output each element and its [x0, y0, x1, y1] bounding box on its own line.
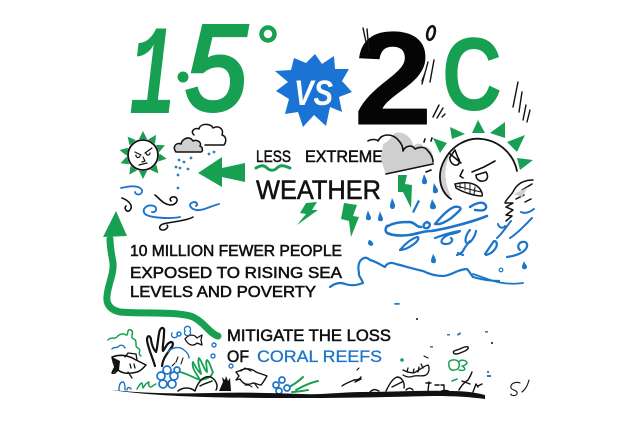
icon: big grey cloud — [368, 133, 434, 174]
icon: stormy waves — [330, 203, 534, 287]
title: 2 degrees C: C — [442, 17, 502, 133]
text: 10 million fewer people: 10 MILLION FEWER PEOPLE — [130, 243, 342, 260]
text: 10 million fewer people — [130, 243, 343, 301]
text: 10 million fewer people: EXPOSED TO RISING SEA — [130, 265, 343, 282]
badge: vs — [275, 54, 352, 127]
arrow: green double arrow pointing left — [198, 157, 245, 187]
signature — [511, 380, 529, 396]
icon: big angry sun — [433, 120, 533, 221]
title: 2 degrees C — [354, 5, 530, 152]
text: mitigate the loss of coral reefs: OF — [227, 348, 249, 366]
illustration: living coral reef with fish — [108, 326, 318, 394]
icon: wind swirls — [121, 186, 219, 230]
heading: less extreme weather: EXTREME — [305, 147, 383, 166]
title: 1.5 degrees: 1 — [129, 7, 176, 152]
icon: clouds with rain — [174, 124, 226, 189]
text: mitigate the loss of coral reefs: CORAL REEFS — [257, 347, 382, 366]
icon: small angry sun — [119, 131, 167, 179]
title: 2 degrees C: 2 — [354, 5, 432, 152]
icon: lightning bolts — [297, 175, 412, 237]
text: mitigate the loss of coral reefs — [227, 327, 391, 366]
heading: less extreme weather: WEATHER — [256, 175, 381, 205]
title: 1.5 degrees: 5 — [185, 0, 248, 136]
arrow: curved green arrow up — [103, 211, 218, 336]
heading: less extreme weather — [256, 147, 383, 205]
title: 1.5 degrees — [129, 0, 274, 152]
heading: less extreme weather: LESS — [256, 147, 291, 166]
badge: vs: VS — [294, 74, 333, 113]
text: mitigate the loss of coral reefs: MITIGATE THE LOSS — [227, 327, 391, 345]
icon: water drops — [366, 174, 527, 269]
text: 10 million fewer people: LEVELS AND POVERTY — [130, 284, 316, 301]
illustration: dead reef with bones and debris — [112, 303, 493, 399]
